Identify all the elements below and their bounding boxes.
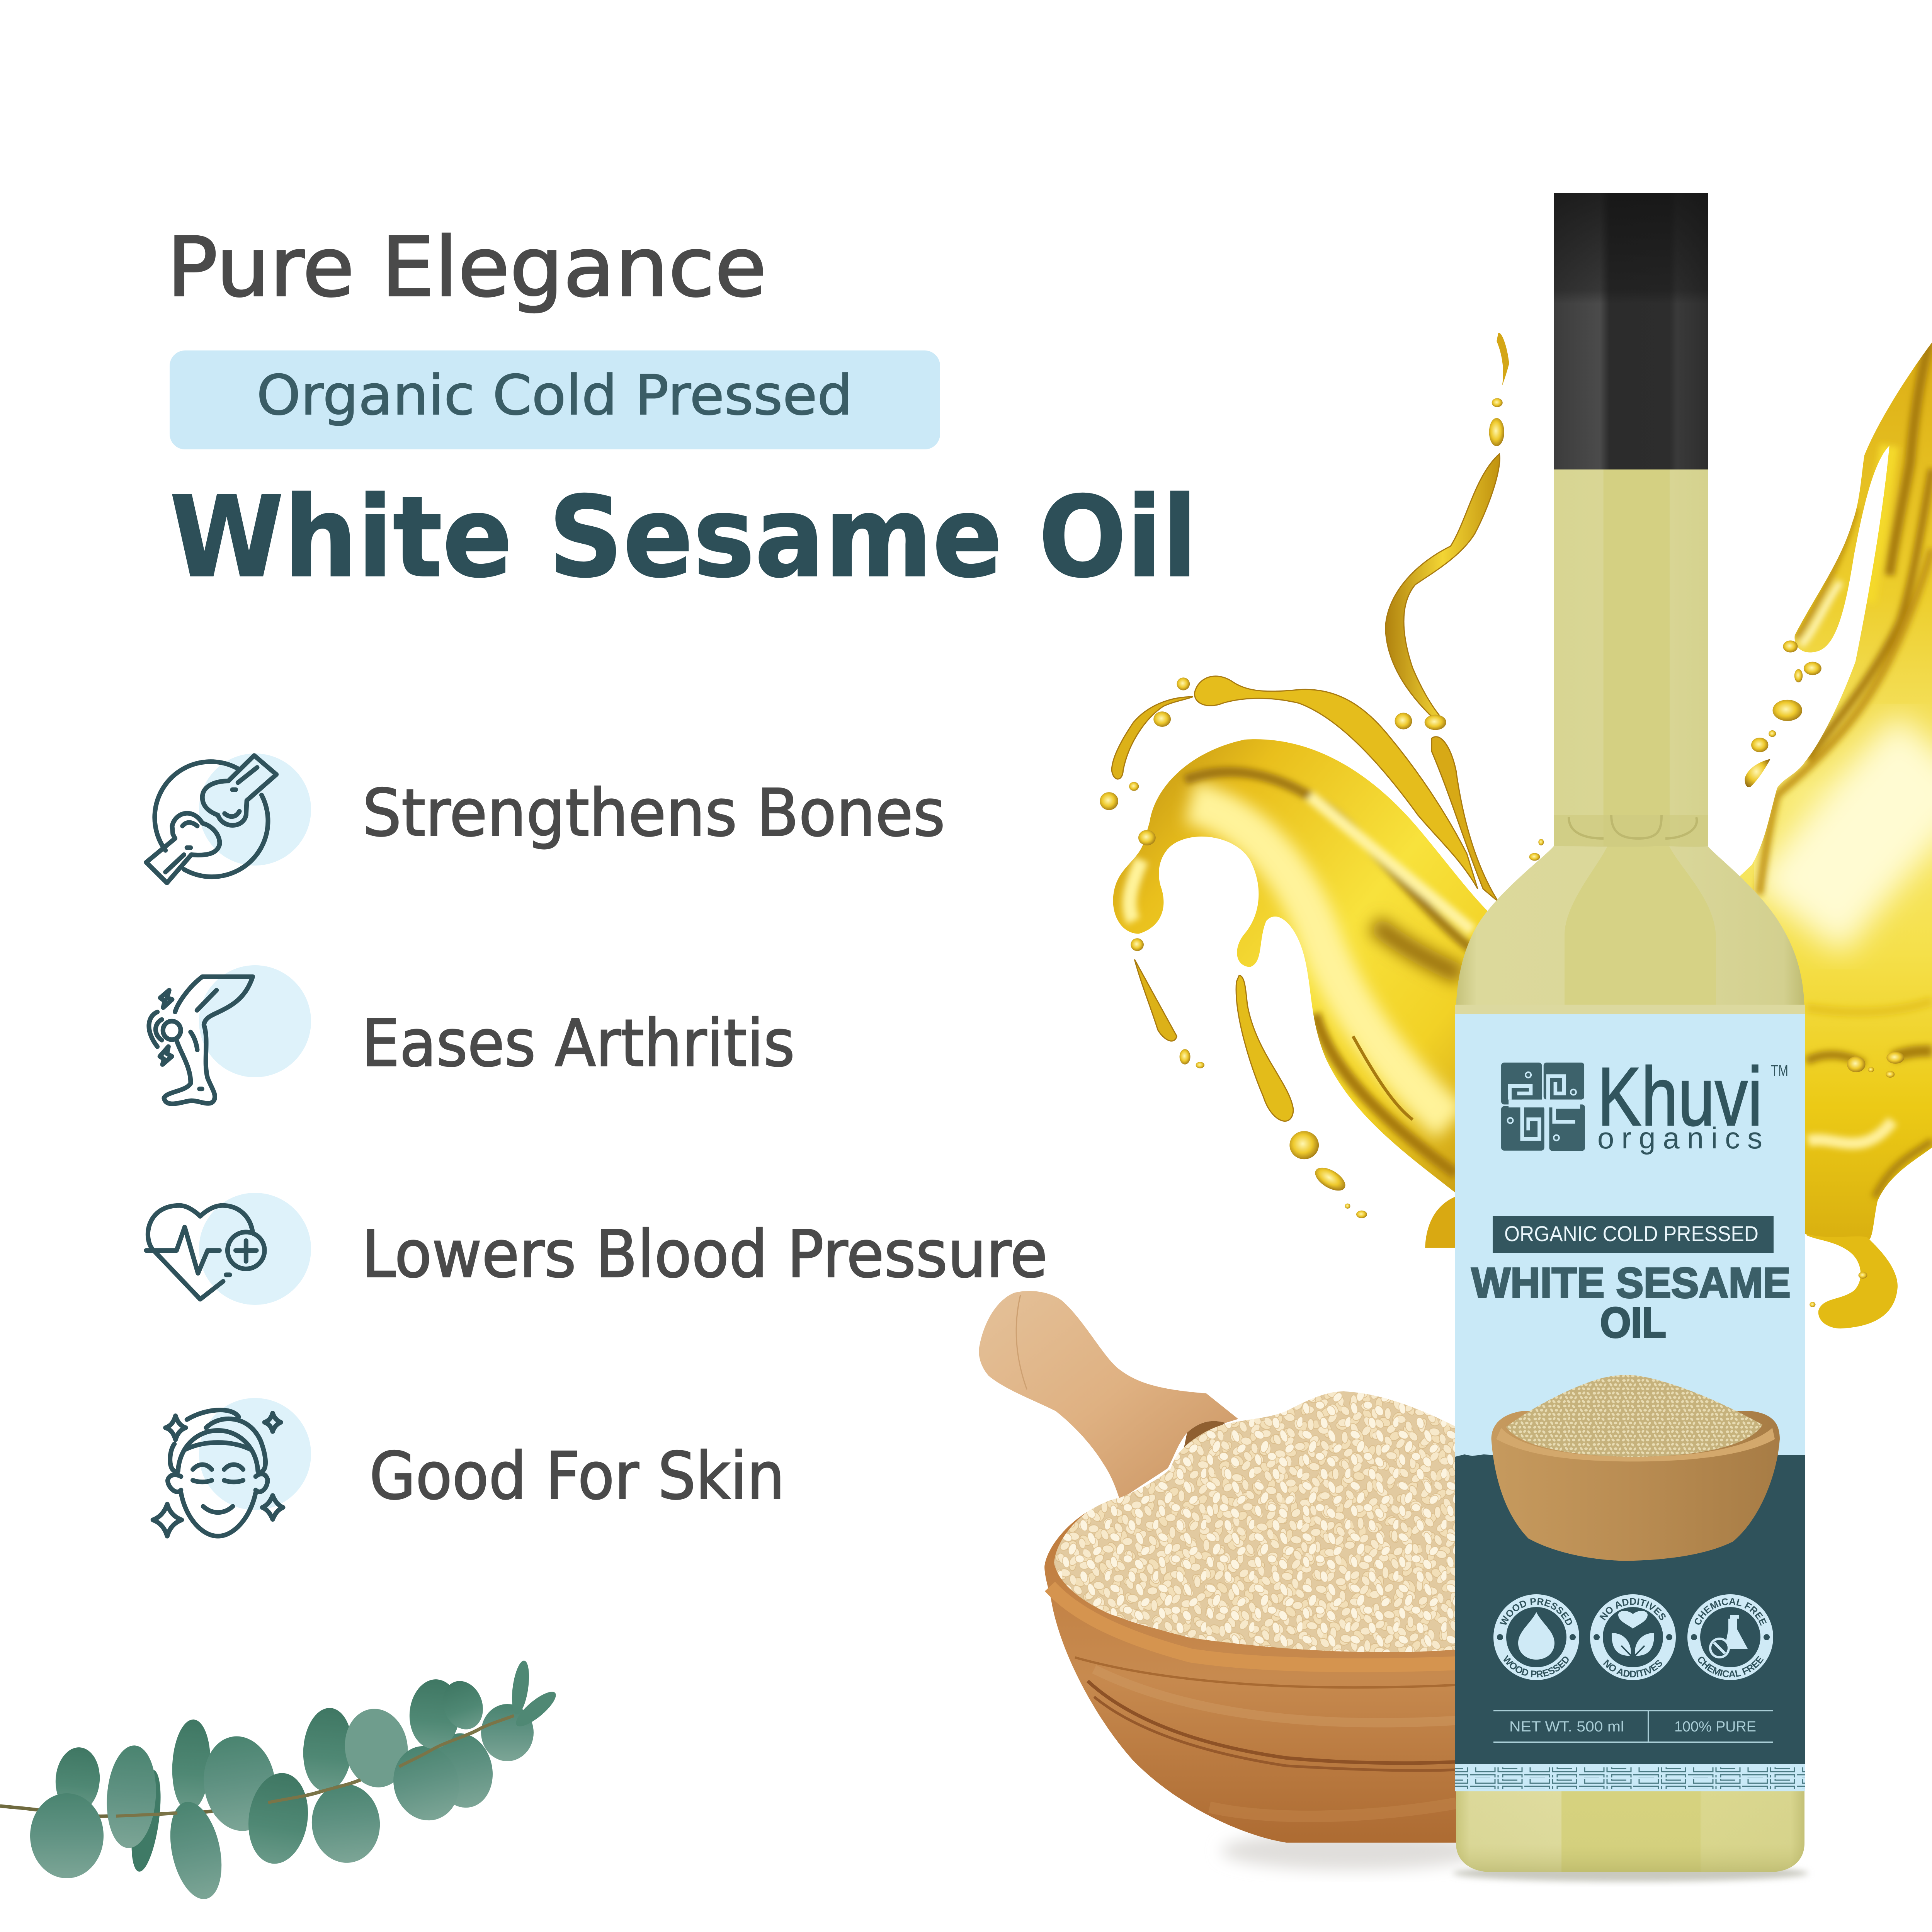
oil splash: right xyxy=(1738,329,1932,1328)
benefit: lowers blood pressure: Lowers Blood Pressure xyxy=(362,1216,1048,1292)
badge: wood pressed: WOOD PRESSED xyxy=(1500,1654,1572,1680)
badge: wood pressed xyxy=(1493,1594,1579,1680)
brand logo: organics xyxy=(1597,1121,1762,1155)
badge: no additives: NO ADDITIVES xyxy=(1598,1596,1668,1622)
benefit: eases arthritis: Eases Arthritis xyxy=(362,1005,795,1081)
label product name: WHITE SESAME xyxy=(1471,1259,1791,1307)
bowl shadow xyxy=(1221,1832,1484,1870)
oil droplets: left xyxy=(1100,398,1544,1218)
oil splash: left xyxy=(1112,333,1509,1248)
benefit: eases arthritis xyxy=(149,965,795,1104)
label xyxy=(1455,1005,1805,1791)
label bowl image xyxy=(1492,1375,1780,1561)
label product name: OIL xyxy=(1600,1299,1666,1347)
icon: heart with pulse xyxy=(146,1206,265,1299)
net weight and purity row xyxy=(1493,1711,1773,1742)
label pattern strip xyxy=(1455,1764,1805,1791)
net weight and purity row: 100% PURE xyxy=(1674,1719,1756,1735)
wooden scoop xyxy=(979,1291,1238,1500)
benefit: good for skin xyxy=(153,1398,785,1536)
badge: no additives: NO ADDITIVES xyxy=(1601,1658,1665,1680)
bottle cap xyxy=(1554,193,1708,469)
badge: chemical free: CHEMICAL FREE xyxy=(1692,1596,1769,1627)
small heading: Pure Elegance xyxy=(167,219,767,315)
benefit: strengthens bones: Strengthens Bones xyxy=(362,775,945,851)
pill: organic cold pressed: Organic Cold Pressed xyxy=(257,364,853,427)
benefit: good for skin: Good For Skin xyxy=(369,1438,785,1514)
label tag xyxy=(1493,1216,1774,1253)
eucalyptus branch xyxy=(0,1660,560,1904)
bottle shoulder xyxy=(1456,846,1804,1014)
badge: no additives xyxy=(1590,1594,1676,1680)
bottle xyxy=(1453,193,1808,1882)
main title: White Sesame Oil xyxy=(170,473,1197,602)
label tag: ORGANIC COLD PRESSED xyxy=(1504,1221,1759,1246)
icon: knee xyxy=(149,977,253,1104)
bowl of sesame seeds with scoop xyxy=(979,1291,1456,1843)
bottle body xyxy=(1456,469,1804,1872)
wooden bowl xyxy=(1044,1512,1456,1843)
benefit: strengthens bones xyxy=(146,753,945,883)
badge: wood pressed: WOOD PRESSED xyxy=(1498,1596,1575,1628)
seed mound xyxy=(1054,1391,1456,1652)
brand logo: Khuvi xyxy=(1597,1050,1762,1143)
label dark panel xyxy=(1455,1454,1805,1764)
pill: organic cold pressed xyxy=(170,350,940,449)
icon: glowing face xyxy=(153,1410,283,1536)
benefit: lowers blood pressure xyxy=(146,1193,1048,1305)
icon: joint xyxy=(146,755,276,883)
brand logo xyxy=(1501,1050,1788,1155)
bottle neck xyxy=(1554,469,1708,846)
net weight and purity row: NET WT. 500 ml xyxy=(1509,1719,1624,1735)
bottle shadow xyxy=(1453,1865,1808,1882)
badge: chemical free xyxy=(1687,1594,1773,1680)
brand logo: TM xyxy=(1771,1062,1788,1079)
label product name xyxy=(1471,1259,1791,1347)
oil droplets: right xyxy=(1745,641,1904,1307)
badge: chemical free: CHEMICAL FREE xyxy=(1695,1654,1766,1680)
